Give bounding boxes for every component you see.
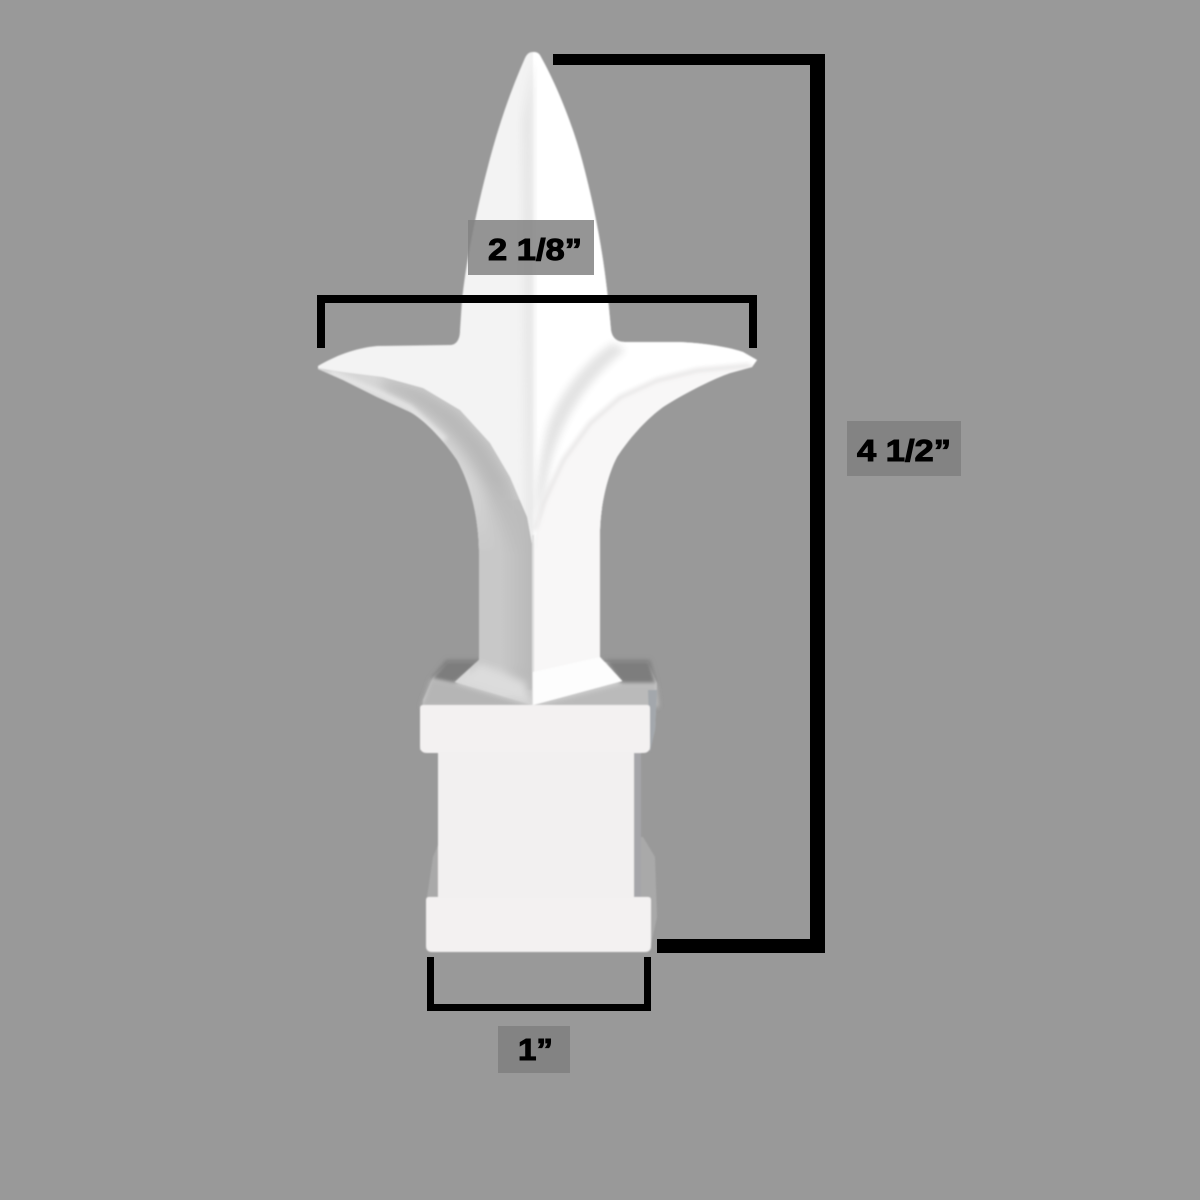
cap left slope	[421, 679, 533, 707]
base dimension bracket	[427, 957, 651, 1011]
crease shadow	[383, 377, 533, 705]
label: 2 1/8 inch: 2 1/8”	[488, 232, 582, 267]
finial blade	[317, 51, 758, 706]
label: 4 1/2 inch: 4 1/2”	[857, 433, 951, 468]
plinth front band	[426, 897, 651, 952]
label: 1 inch: 1”	[518, 1032, 553, 1067]
centre ridge shade	[524, 88, 535, 474]
arm light rim	[330, 372, 445, 440]
width dimension bracket	[317, 295, 757, 348]
centre vertical edge	[532, 535, 534, 705]
pyramid cap	[420, 662, 657, 750]
right wing lower tone	[536, 373, 723, 550]
body right shadow	[634, 753, 641, 900]
infographic canvas	[317, 51, 961, 1073]
right edge of cap	[648, 690, 657, 752]
lower stem tone	[474, 526, 518, 668]
label: 4 1/2 inch	[847, 421, 961, 476]
right side highlight	[534, 52, 757, 536]
lower stem shade	[517, 504, 532, 689]
right foot	[532, 672, 535, 704]
band tone	[318, 368, 532, 704]
label: 1 inch	[498, 1026, 570, 1073]
lower plinth rear	[427, 837, 657, 945]
foot light	[470, 665, 530, 702]
base body	[438, 750, 636, 900]
cap rear left shadow	[431, 660, 484, 684]
height dimension bracket	[553, 54, 825, 953]
cap right slope	[533, 684, 659, 707]
cap rear right shadow	[604, 660, 656, 684]
left lower band	[318, 368, 532, 705]
blade base tone	[317, 51, 534, 542]
right crease line	[535, 365, 750, 530]
right inner soft shadow	[535, 343, 625, 520]
finial product illustration	[300, 45, 780, 952]
cap front band	[420, 705, 650, 753]
label: 2 1/8 inch	[468, 220, 594, 275]
